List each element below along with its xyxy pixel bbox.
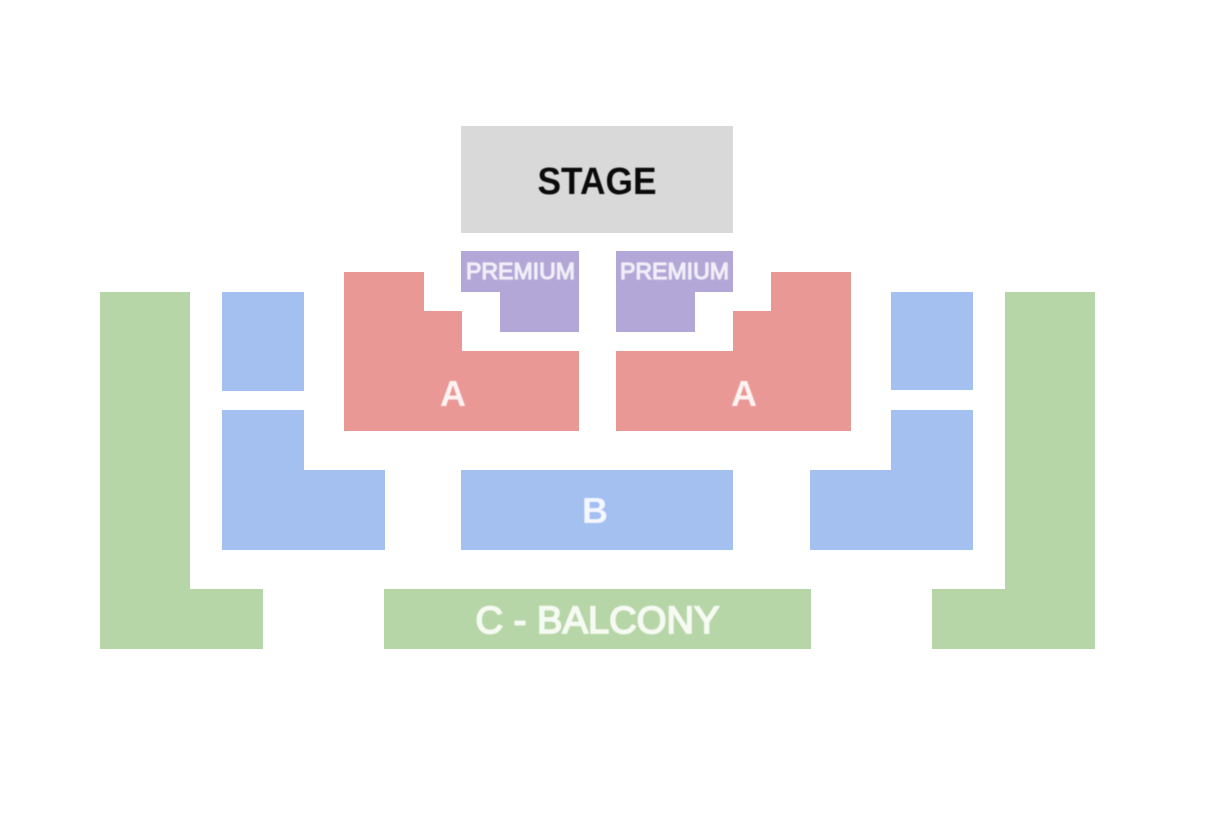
section B upper left	[222, 292, 304, 391]
section A right	[616, 272, 851, 431]
stage	[461, 126, 733, 233]
balcony center: C - BALCONY	[476, 600, 720, 642]
premium section right: PREMIUM	[620, 258, 729, 284]
section B center: B	[582, 490, 608, 531]
section B center	[461, 470, 733, 550]
stage: STAGE	[538, 161, 656, 203]
premium section left	[461, 251, 579, 332]
premium section right	[616, 251, 733, 332]
premium section left: PREMIUM	[466, 258, 575, 284]
section B lower right	[810, 410, 973, 550]
section A right: A	[731, 373, 757, 414]
balcony right	[932, 292, 1095, 649]
section B lower left	[222, 410, 385, 550]
section A left: A	[440, 373, 466, 414]
balcony center	[384, 589, 811, 649]
section A left	[344, 272, 579, 431]
balcony left	[100, 292, 263, 649]
section B upper right	[891, 292, 973, 390]
